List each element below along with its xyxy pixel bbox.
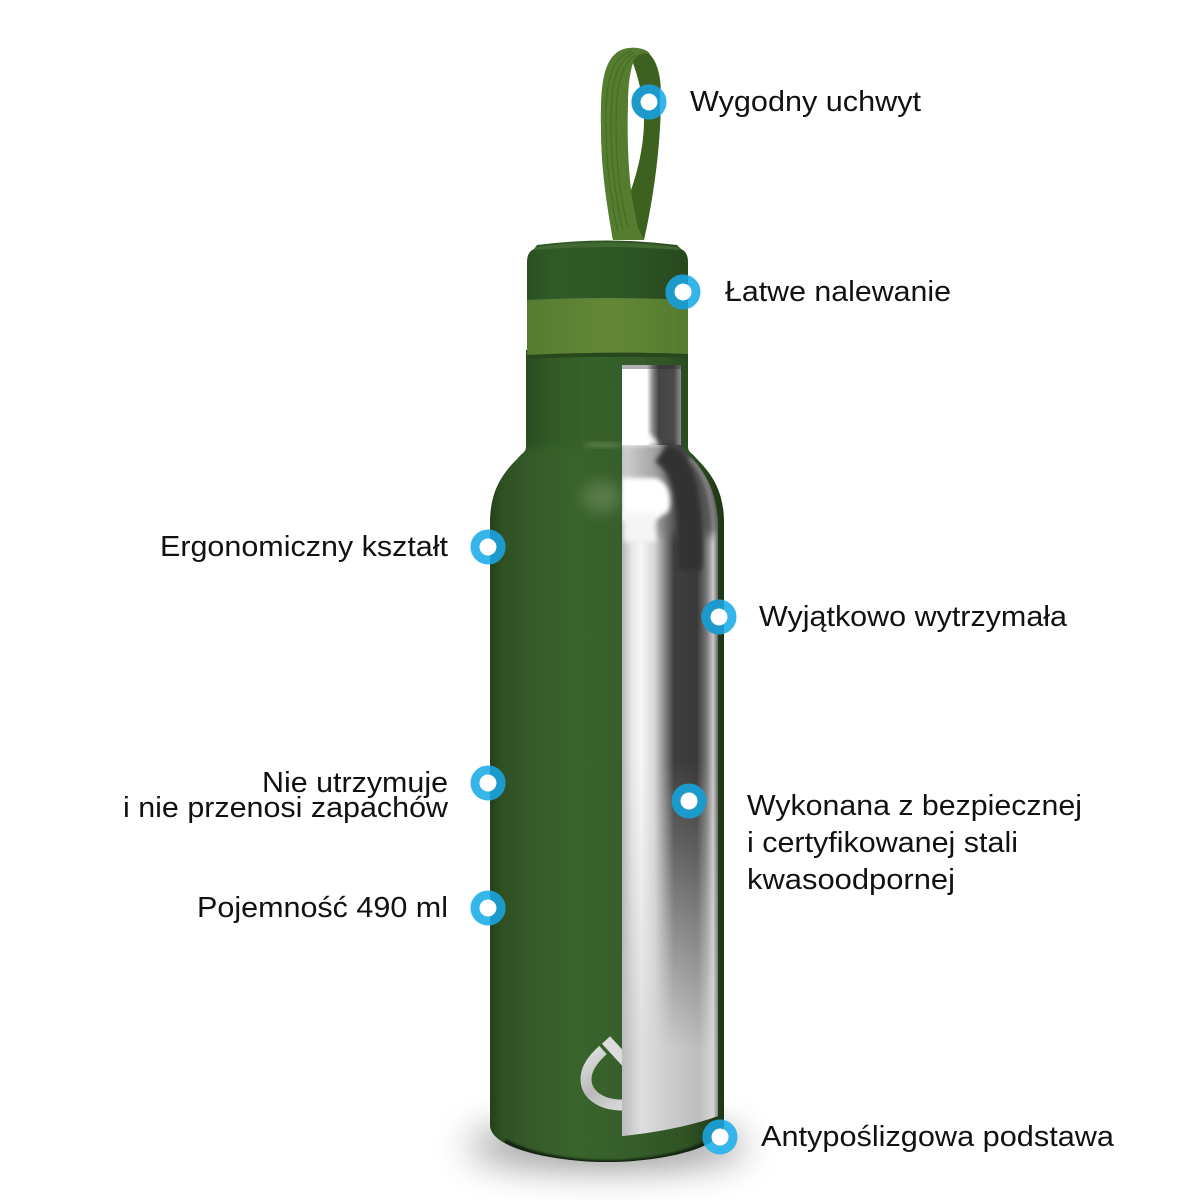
label: odours [123, 767, 448, 824]
marker: capacity [475, 895, 501, 921]
icon: drop logo [586, 1040, 640, 1105]
ground shadow [467, 1124, 747, 1168]
marker: non-slip base [707, 1124, 733, 1150]
label: handle: Wygodny uchwyt [690, 86, 921, 118]
label: non-slip base: Antypoślizgowa podstawa [761, 1121, 1114, 1153]
label: capacity: Pojemność 490 ml [197, 892, 448, 924]
shoulder gradient [622, 440, 726, 535]
label: odours: Nie utrzymuje [262, 767, 448, 799]
shoulder highlight [583, 443, 623, 447]
marker: durable [706, 604, 732, 630]
shoulder white reflection [622, 478, 670, 520]
label: steel: i certyfikowanej stali [747, 827, 1018, 859]
body highlight [582, 481, 622, 513]
icon: carrying loop handle [601, 48, 661, 240]
label: pouring: Łatwe nalewanie [725, 276, 951, 308]
label: steel: Wykonana z bezpiecznej [747, 790, 1082, 822]
label: ergonomic shape: Ergonomiczny kształt [160, 531, 448, 563]
light band [527, 298, 688, 355]
neck shading [480, 340, 734, 1162]
marker: ergonomic shape [475, 534, 501, 560]
marker: odours [475, 770, 501, 796]
bottle cap [527, 240, 688, 359]
bottom edge shade [505, 1141, 710, 1162]
bottle body [490, 350, 724, 1162]
marker: steel [676, 788, 702, 814]
shoulder dark reflection [662, 452, 690, 570]
bottle illustration [467, 48, 747, 1168]
steel inner wall cutaway [622, 360, 726, 1140]
marker: pouring [670, 279, 696, 305]
marker: handle [636, 89, 662, 115]
label: steel [747, 790, 1082, 896]
label: durable: Wyjątkowo wytrzymała [759, 601, 1067, 633]
shoulder rim light [690, 458, 714, 540]
label: steel: kwasoodpornej [747, 864, 955, 896]
label: odours: i nie przenosi zapachów [123, 792, 448, 824]
lower fade [622, 780, 718, 1136]
